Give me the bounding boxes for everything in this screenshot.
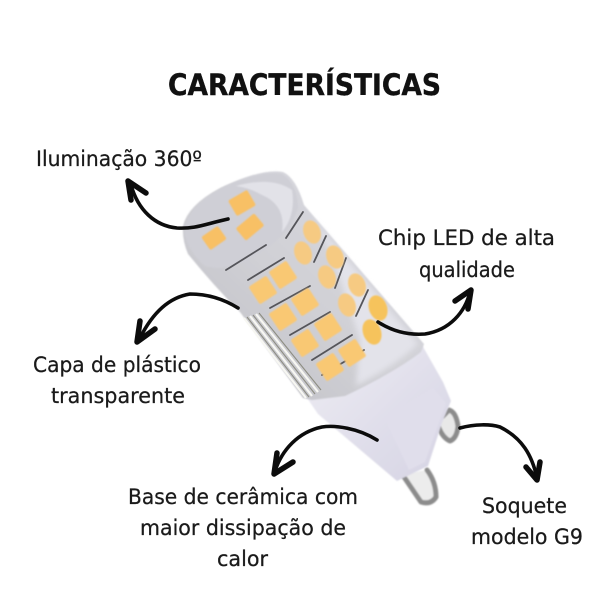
arrow: Capa de plástico [137,294,238,342]
arrow: Chip LED [378,290,471,334]
label: Soquete modelo G9: modelo G9 [471,525,583,549]
transparent capsule [183,171,424,400]
label: Capa de plástico transparente [33,353,201,408]
top LEDs [201,190,264,250]
label: Capa de plástico transparente: Capa de plástico [33,353,201,377]
capsule right glow [312,218,418,386]
label: Base de cerâmica com maior dissipação de calor [128,485,358,571]
front LEDs [248,260,367,382]
arrow: Soquete [460,425,540,480]
dark LED separators [226,212,368,375]
title: CARACTERÍSTICAS [168,68,441,102]
label: Base de cerâmica com maior dissipação de calor: Base de cerâmica com [128,485,358,509]
arrow: Iluminação 360º [128,181,228,228]
base highlight [384,388,446,470]
arrow: Base de cerâmica [274,426,377,474]
label: Chip LED de alta qualidade: qualidade [419,258,515,282]
label: Soquete modelo G9: Soquete [482,494,567,518]
side LEDs [291,218,391,347]
ceramic base [303,338,451,481]
ribbed left side [244,314,318,398]
cap sheen [236,182,293,232]
label: Base de cerâmica com maior dissipação de calor: calor [217,547,268,571]
top cap [184,173,298,268]
label: Base de cerâmica com maior dissipação de calor: maior dissipação de [140,516,346,540]
label: Chip LED de alta qualidade: Chip LED de alta [378,226,555,250]
label: Iluminação 360º: Iluminação 360º [36,147,202,171]
illustration: G9 LED bulb [183,171,458,503]
label: Capa de plástico transparente: transparente [51,384,185,408]
label: Chip LED de alta qualidade [378,226,555,282]
bulb pins [402,410,458,503]
label: Soquete modelo G9 [471,494,583,549]
